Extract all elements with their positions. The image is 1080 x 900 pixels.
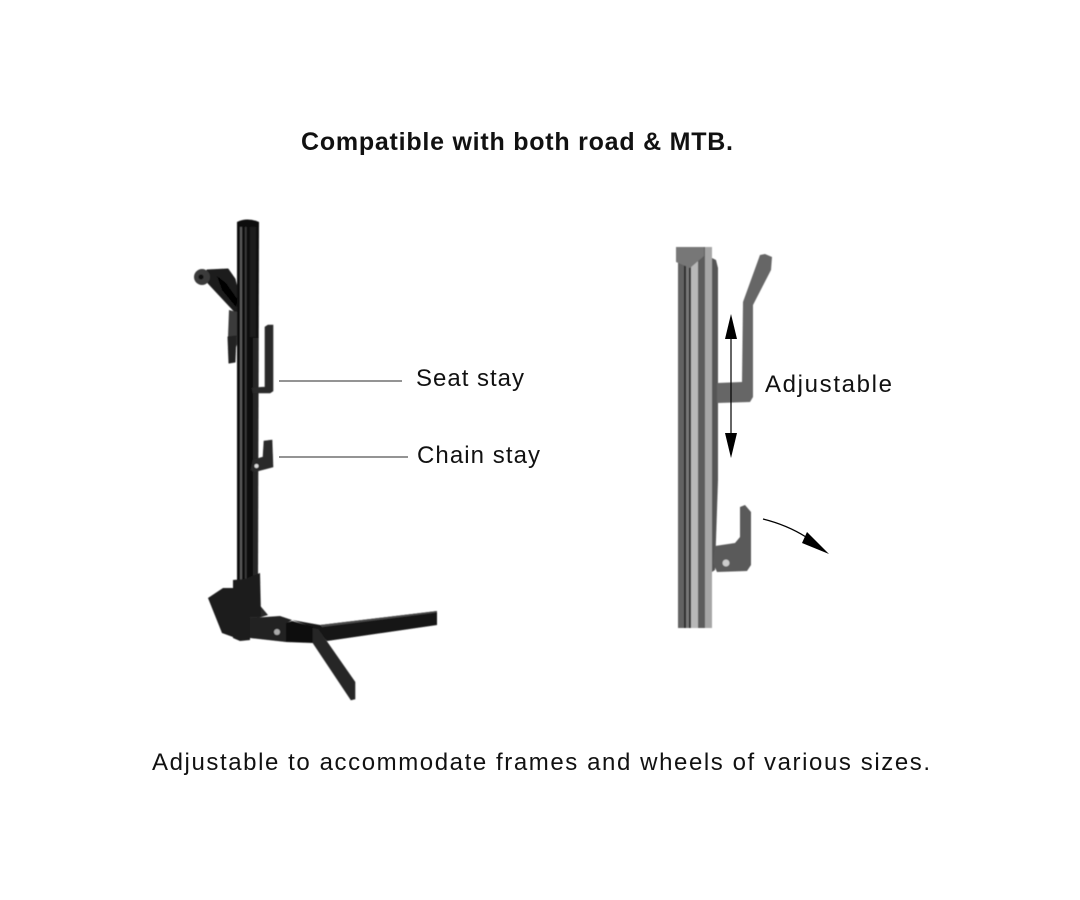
vertical post bbox=[237, 220, 259, 582]
base bbox=[208, 573, 437, 700]
title: Compatible with both road & MTB. bbox=[301, 128, 733, 156]
leader line: chain stay bbox=[279, 456, 408, 458]
label: seat stay: Seat stay bbox=[416, 365, 524, 392]
lower hook bbox=[713, 505, 751, 572]
curved arrow bbox=[763, 519, 829, 554]
label: chain stay: Chain stay bbox=[417, 442, 540, 469]
product: post close-up bbox=[676, 247, 772, 628]
leader line: seat stay bbox=[279, 380, 402, 382]
product: full stand bbox=[194, 220, 437, 700]
clamp arm with roller bbox=[194, 269, 240, 363]
chain stay hook bbox=[251, 440, 273, 472]
label: adjustable: Adjustable bbox=[765, 371, 892, 398]
seat stay hook bbox=[252, 325, 273, 393]
double arrow: adjustable bbox=[725, 314, 737, 458]
post profile bbox=[676, 247, 718, 628]
caption: Adjustable to accommodate frames and wheels of various sizes. bbox=[152, 749, 930, 776]
upper hook bbox=[717, 254, 772, 403]
